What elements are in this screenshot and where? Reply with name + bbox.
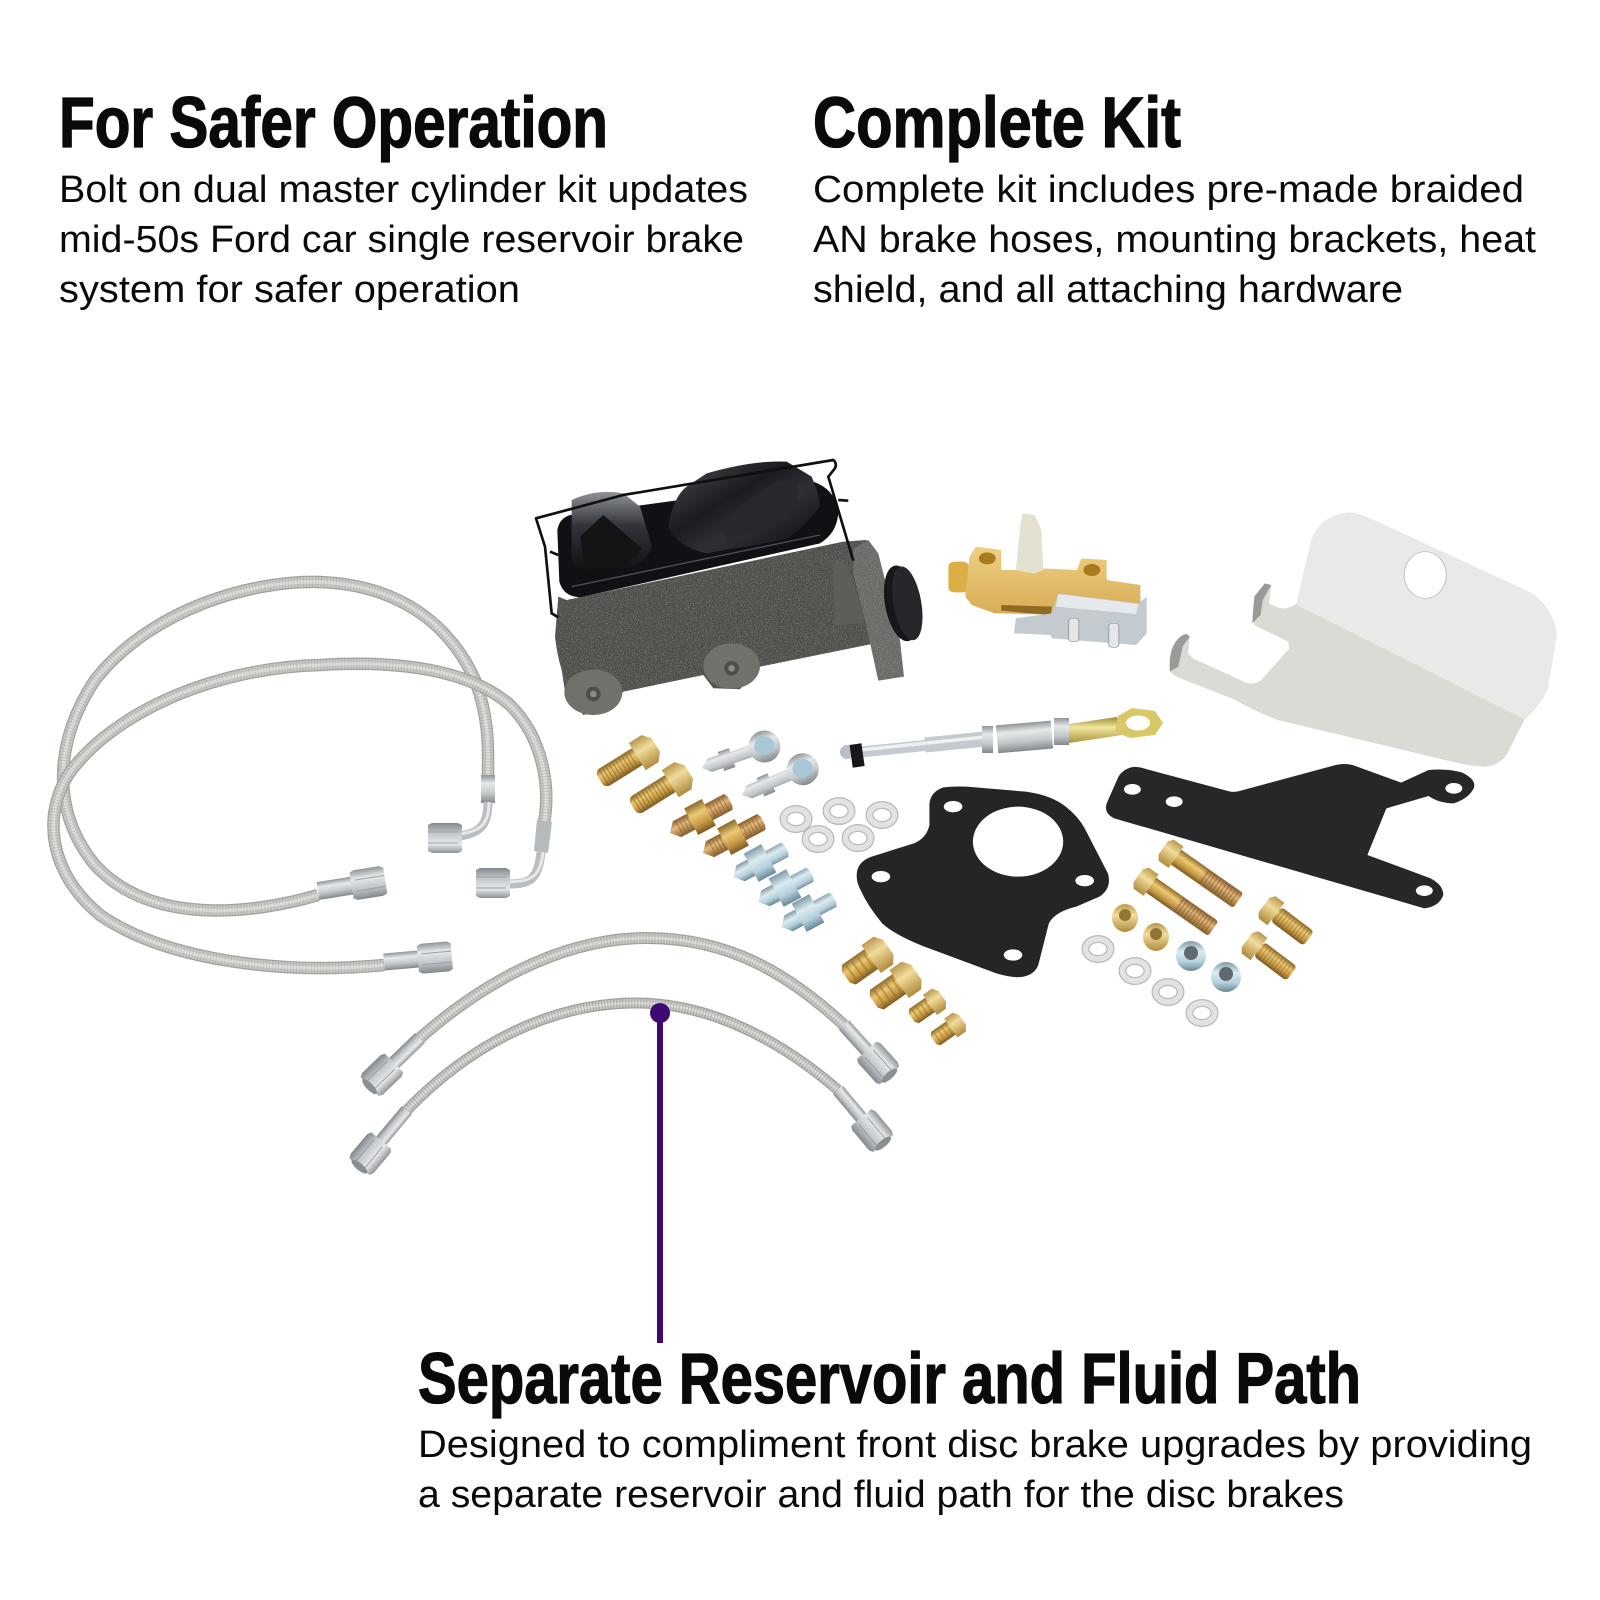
eyelet ring (1115, 708, 1163, 738)
mounting bracket (1106, 764, 1474, 908)
right dome diagonal highlight (717, 480, 798, 538)
body text: complete kit: AN brake hoses, mounting brackets, heat (813, 219, 1536, 261)
crush washers (784, 801, 894, 849)
shield tabs shading (1170, 583, 1271, 672)
cast iron body (555, 540, 875, 715)
steel union 2 (751, 860, 819, 916)
bracket highlight (1056, 594, 1138, 614)
rod shaft thick (925, 739, 985, 745)
fitting: bent end A (428, 775, 495, 853)
body text: separate reservoir: Designed to compliment front disc brake upgrades by providing (418, 1424, 1532, 1466)
nut (982, 726, 993, 753)
banjo bolt 1 (591, 731, 664, 794)
proportioning valve (948, 513, 1147, 647)
rod highlight (860, 737, 985, 750)
body text: safer operation: mid-50s Ford car single reservoir brake (59, 219, 744, 261)
hex sleeve (996, 721, 1053, 753)
inverted flare nuts (836, 933, 969, 1050)
outlet port left (564, 670, 622, 715)
fitting: hose D right (827, 1080, 897, 1156)
hose B (53, 664, 546, 968)
heat shield (1170, 513, 1556, 767)
steel union 3 (774, 885, 842, 941)
fitting: hose D left (346, 1100, 418, 1179)
long bolt 2 (1131, 865, 1221, 939)
body text: complete kit (813, 169, 1536, 311)
hardware bolts and nuts (1086, 837, 1317, 1023)
short bolt 1 (1256, 894, 1317, 950)
fitting: straight end B (383, 941, 453, 977)
heading: Separate Reservoir and Fluid Path: Separate Reservoir and Fluid Path (418, 1340, 1361, 1419)
rubber bushing (850, 743, 865, 768)
text block: For Safer Operation (59, 84, 748, 311)
fitting: hose C left (357, 1027, 430, 1100)
text block: Complete Kit (813, 84, 1536, 311)
body text: safer operation: Bolt on dual master cylinder kit updates (59, 169, 748, 211)
steel union 1 (726, 835, 794, 891)
callout line and dot (650, 1003, 670, 1343)
flat washers (1086, 939, 1214, 1023)
hose A (63, 582, 488, 910)
body text: safer operation: system for safer operation (59, 269, 520, 311)
rod shaft thin (860, 745, 930, 752)
ball end (840, 745, 854, 759)
plate center hole (973, 807, 1063, 877)
fitting: bent end B (476, 820, 552, 898)
short braided hoses (346, 938, 903, 1179)
zinc bracket (1014, 593, 1147, 645)
casting rib (833, 560, 863, 625)
heading: For Safer Operation: For Safer Operation (59, 84, 608, 163)
fitting: straight end A (316, 866, 388, 906)
body text: complete kit: Complete kit includes pre-made braided (813, 169, 1524, 211)
callout line (657, 1013, 663, 1343)
brass union 1 (663, 788, 737, 846)
retaining wire bail (536, 460, 853, 617)
small fittings group (591, 726, 969, 1050)
brake pushrod (840, 708, 1163, 768)
body text: separate reservoir (418, 1424, 1532, 1516)
nyloc nut 2 (1211, 962, 1241, 992)
shield upper face (1297, 513, 1556, 719)
text block: Separate Reservoir and Fluid Path (418, 1340, 1532, 1516)
brass plug (948, 562, 969, 592)
body text: separate reservoir: a separate reservoir and fluid path for the disc brakes (418, 1474, 1344, 1516)
rubber boot (879, 563, 928, 644)
master cylinder (536, 460, 928, 715)
reservoir lid rim (557, 482, 838, 597)
banjo fitting 2 (736, 748, 824, 810)
port holes (979, 552, 1100, 576)
right lid dome (668, 461, 820, 553)
left dome dark facet (580, 515, 642, 568)
nut 2 (1054, 718, 1069, 745)
mounting flange (853, 540, 904, 681)
long braided hoses (53, 582, 552, 977)
brass union 2 (696, 808, 770, 866)
long bolt 1 (1156, 837, 1246, 911)
bracket studs (1069, 618, 1119, 647)
outlet port right (703, 643, 760, 689)
heading: Complete Kit: Complete Kit (813, 84, 1181, 163)
nyloc nut 1 (1176, 941, 1206, 971)
brass nut 1 (1112, 904, 1138, 932)
lid rim highlight (572, 535, 820, 587)
hose D (407, 1003, 838, 1110)
banjo bolt 2 (624, 758, 697, 821)
shield lower face and tabs (1170, 513, 1556, 767)
fitting: hose C right (833, 1015, 903, 1088)
brass body (965, 547, 1140, 615)
shield hole (1404, 552, 1446, 598)
left lid dome (572, 492, 652, 575)
plate bolt holes (872, 801, 1094, 961)
eyelet shaft (1069, 717, 1122, 743)
callout dot (650, 1003, 670, 1023)
plastic switch post (1016, 513, 1043, 573)
banjo fitting 1 (697, 726, 785, 783)
short bolt 2 (1239, 929, 1300, 985)
bracket holes (1124, 783, 1462, 896)
hose C (420, 938, 844, 1038)
mounting plate (857, 786, 1109, 977)
brass shadow strip (1001, 605, 1052, 615)
brass nut 2 (1143, 923, 1169, 951)
body text: complete kit: shield, and all attaching hardware (813, 269, 1403, 311)
body text: safer operation (59, 169, 748, 311)
